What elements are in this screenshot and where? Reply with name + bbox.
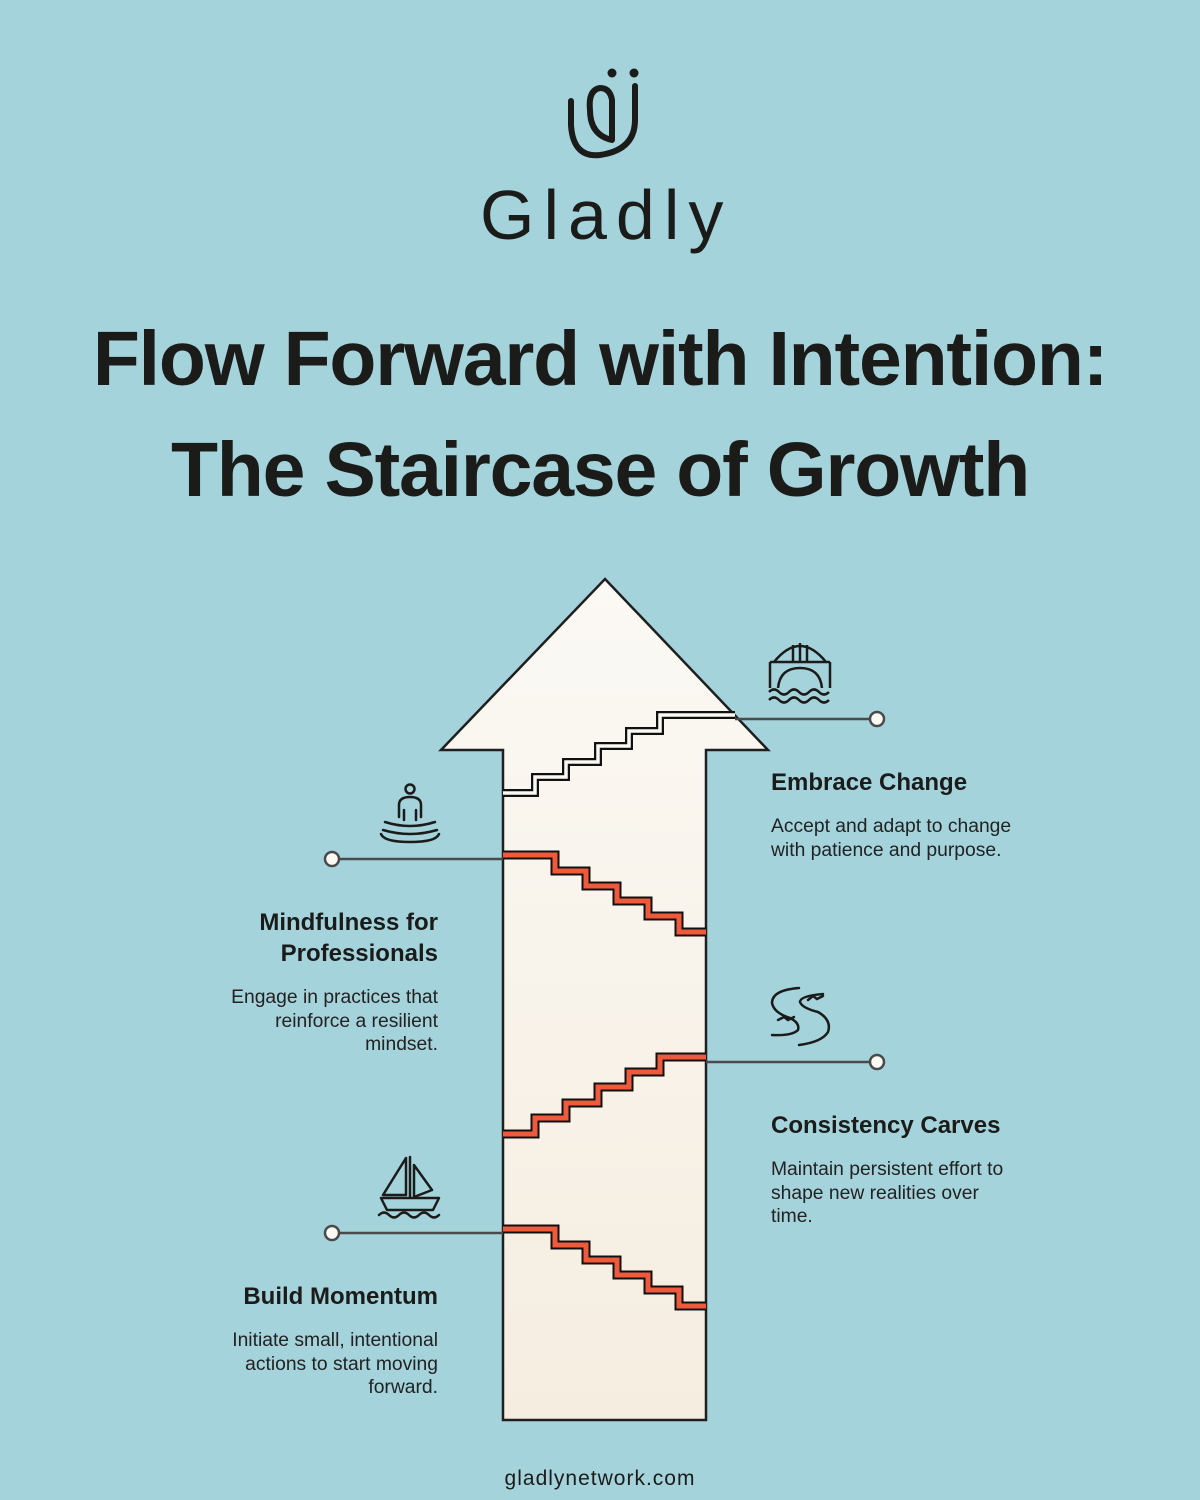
text: mindfulness: [231, 909, 438, 1055]
text: mindfulness: Mindfulness for: [259, 909, 438, 936]
text: embrace change: with patience and purpose.: [771, 840, 1001, 860]
text: embrace change: Embrace Change: [771, 769, 967, 796]
logo: [480, 68, 732, 254]
text: consistency carves: time.: [771, 1206, 813, 1227]
icon: bridge: [769, 643, 830, 702]
text: consistency carves: Consistency Carves: [771, 1112, 1000, 1139]
text: mindfulness: mindset.: [365, 1034, 438, 1055]
connector lines: [325, 712, 884, 1240]
icon: river: [772, 988, 829, 1045]
text: build momentum: [232, 1283, 438, 1398]
text: consistency carves: shape new realities over: [771, 1182, 979, 1204]
text: mindfulness: Engage in practices that: [231, 987, 438, 1008]
text: build momentum: forward.: [368, 1377, 438, 1398]
text: build momentum: Build Momentum: [243, 1283, 438, 1310]
text: build momentum: actions to start moving: [245, 1354, 438, 1374]
icon: meditation: [381, 784, 439, 842]
text: mindfulness: reinforce a resilient: [275, 1010, 438, 1032]
stairs: red 2: [503, 1057, 706, 1134]
text: embrace change: Accept and adapt to change: [771, 816, 1011, 837]
stairs: red 1: [503, 855, 706, 932]
title: [93, 316, 1107, 513]
icon: sailboat: [379, 1157, 439, 1218]
footer url: gladlynetwork.com: [505, 1467, 695, 1490]
text: embrace change: [771, 769, 1011, 860]
icon: gladly mark: [568, 68, 638, 158]
stairs: red 3: [503, 1229, 706, 1306]
stairs: top white: [503, 715, 735, 793]
title: Flow Forward with Intention:: [93, 316, 1107, 402]
wordmark: Gladly: [480, 176, 732, 254]
arrow shape: [441, 579, 768, 1420]
text: consistency carves: [771, 1112, 1003, 1227]
text: mindfulness: Professionals: [281, 940, 438, 967]
text: build momentum: Initiate small, intentional: [232, 1330, 438, 1351]
title: The Staircase of Growth: [171, 427, 1029, 513]
text: consistency carves: Maintain persistent effort to: [771, 1159, 1003, 1180]
